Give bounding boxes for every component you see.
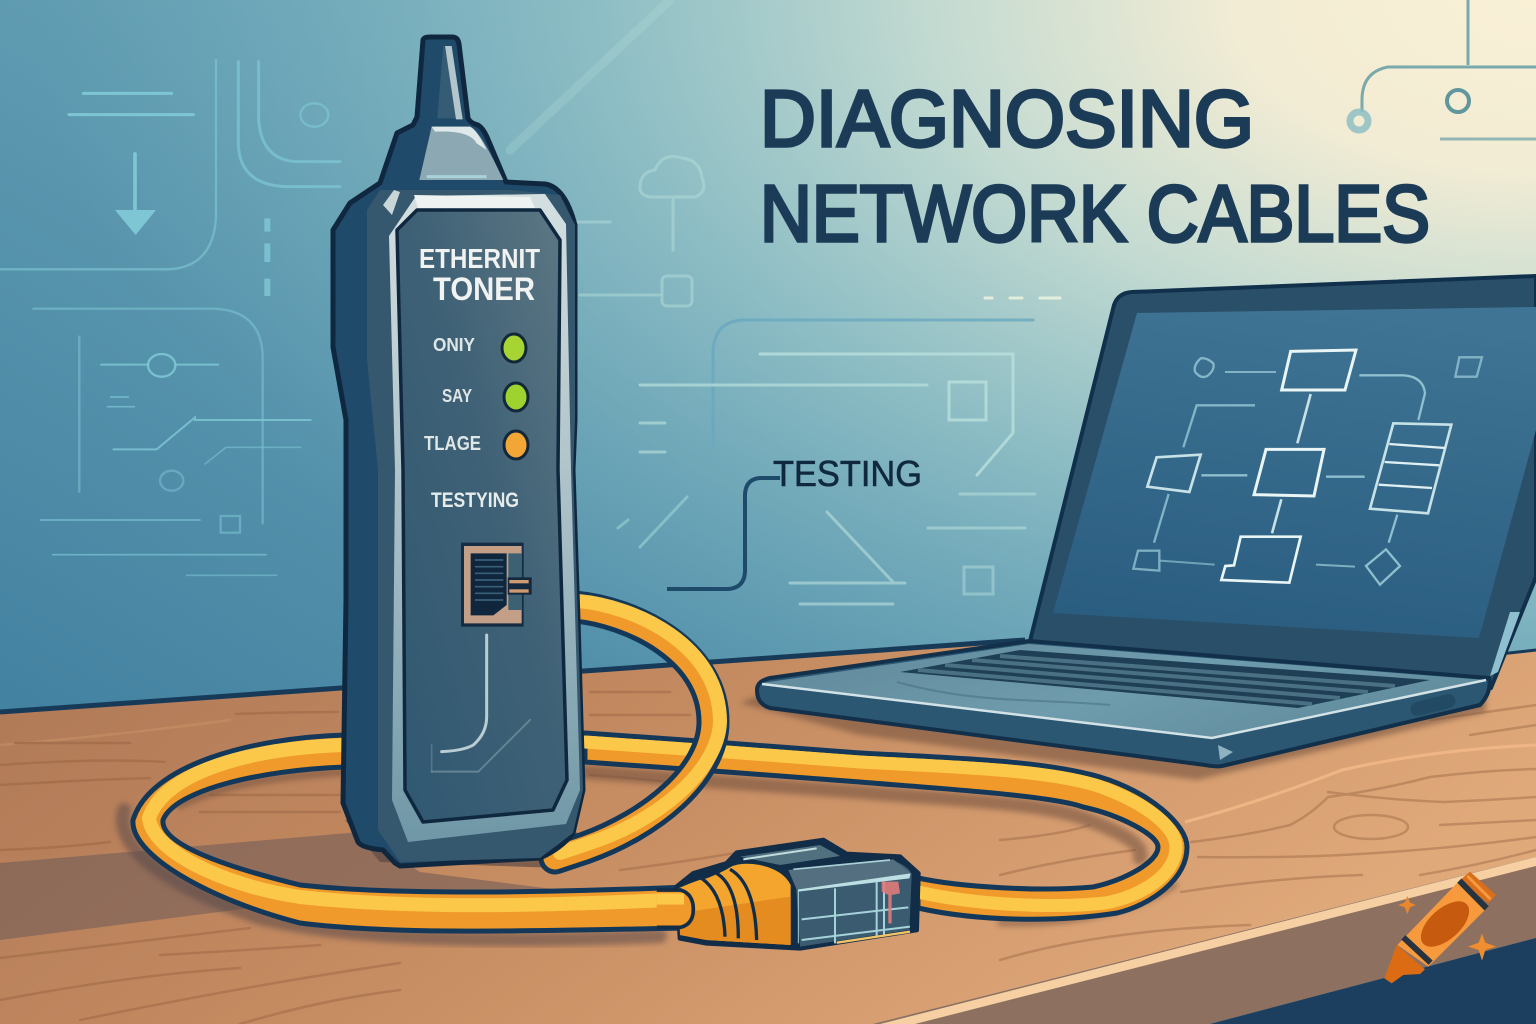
ethernet port — [461, 543, 532, 627]
device shadow — [345, 820, 610, 868]
callout: testing label: TESTING — [773, 453, 922, 494]
device front panel — [397, 210, 567, 822]
background circuit pattern: centre — [510, 0, 1060, 604]
laptop base — [757, 641, 1490, 766]
laptop deck — [762, 644, 1486, 738]
device body — [333, 37, 583, 866]
connector boot — [678, 864, 791, 945]
laptop keyboard — [900, 650, 1430, 708]
device bezel — [389, 194, 580, 842]
device label — [419, 243, 540, 307]
laptop side ports — [1409, 693, 1457, 717]
cable shadows on table — [123, 772, 1175, 939]
connector back plate — [677, 840, 918, 948]
table highlight grain — [1185, 745, 1536, 822]
ethernet cable — [133, 601, 1187, 931]
background circuit pattern: left — [0, 60, 340, 575]
RJ45 connector — [657, 840, 918, 948]
device nozzle — [419, 44, 503, 180]
cable left section — [133, 735, 690, 931]
laptop shadow — [740, 690, 1486, 780]
cable front loop — [555, 601, 720, 858]
table front edge — [873, 857, 1536, 1024]
laptop lid — [1029, 276, 1536, 688]
ethernet toner device — [333, 37, 583, 866]
callout: testing label — [667, 453, 922, 589]
connector cable stub — [657, 890, 693, 927]
testying label: TESTYING — [431, 489, 519, 512]
indicator: oniy — [433, 334, 526, 362]
title: DIAGNOSING — [760, 74, 1254, 163]
indicator: tlage: TLAGE — [424, 433, 481, 455]
wooden table — [0, 640, 1536, 1024]
table shadow band — [0, 832, 560, 940]
laptop — [740, 276, 1536, 780]
indicator: oniy: ONIY — [433, 335, 475, 355]
cable right section — [585, 733, 1187, 919]
background circuit pattern: top right — [1350, 0, 1536, 139]
connector clear body — [795, 861, 912, 947]
indicator: tlage — [424, 431, 528, 459]
crayon sparkles — [1398, 896, 1416, 914]
indicator: say: SAY — [442, 386, 472, 406]
title: NETWORK CABLES — [760, 169, 1430, 258]
device panel trace — [432, 635, 530, 772]
device label: TONER — [433, 271, 535, 307]
title — [760, 74, 1430, 258]
laptop diagram on screen — [1133, 350, 1482, 585]
device side strip — [367, 190, 583, 862]
device label: ETHERNIT — [419, 243, 540, 274]
indicator: say — [442, 383, 528, 411]
crayon logo — [1384, 872, 1496, 983]
laptop deck trace — [897, 682, 1110, 705]
table wood grain — [0, 692, 1536, 1024]
